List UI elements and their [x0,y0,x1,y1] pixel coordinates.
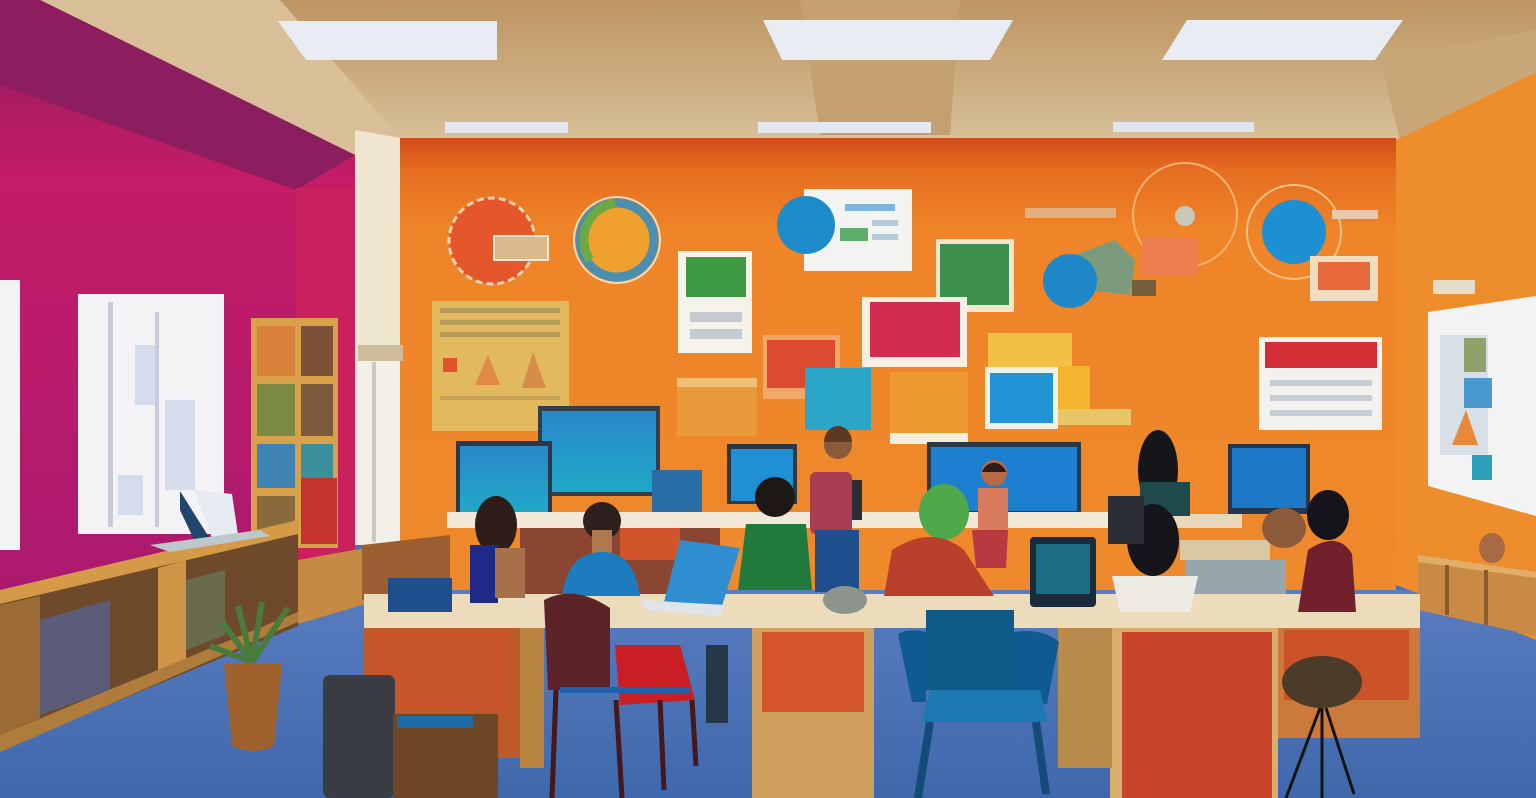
window: beside column [358,345,403,545]
panel: orange back wall [400,138,1396,598]
chair: maroon with red seat [544,594,728,798]
wall card: blue and yellow panel [985,333,1131,429]
student: green top [738,477,812,590]
back desk [447,512,1286,600]
standing student [810,426,862,592]
computer monitors on back desk [456,406,1310,516]
student: green hair, red top [884,484,994,596]
laptop on the counter [150,490,270,552]
wall graphic: blue circle with white panel [777,189,912,271]
stool: right foreground [1282,656,1362,798]
front desk [364,594,1420,798]
wall poster: yellow notice with figures [432,301,569,431]
panel: magenta left wall [0,0,355,600]
side counter: left low shelf [0,520,450,752]
student: dark hair, purple top [470,496,525,603]
student: maroon backpack [1262,490,1356,612]
window: left [78,294,224,534]
wall card: orange notes row [677,372,968,444]
potted plant [210,602,288,751]
student: blue shirt [562,502,640,596]
wall graphic: blue circles and network at upper right [1025,163,1378,308]
wall chart: right side display [1428,280,1536,516]
wall card: green heading document [678,251,752,353]
wall card: red banner [862,297,967,367]
wall card: red heading document [1259,337,1382,430]
panel: blue carpet floor [0,590,1536,798]
wall graphic: multicolour ring [574,197,660,283]
wall card: teal panel [805,368,871,430]
student: black hair pair [1108,430,1190,576]
wall card: green board [936,239,1014,312]
seated students [470,430,1356,612]
teacher with orange skirt [972,460,1008,568]
wall card: small red note [763,335,840,399]
panel: orange right wall [1396,72,1536,640]
wall graphic: red circle chart [449,198,548,284]
panel: ceiling [0,0,1536,160]
chair: blue [898,610,1059,798]
side cabinet: right wall [1418,533,1536,636]
laptops and bags on front desk [388,537,1198,616]
ceiling lights [278,20,1403,133]
suitcase and box foreground [323,675,498,798]
panel: white column [355,130,400,545]
bookshelf: tall shelf on the magenta wall [251,318,338,548]
